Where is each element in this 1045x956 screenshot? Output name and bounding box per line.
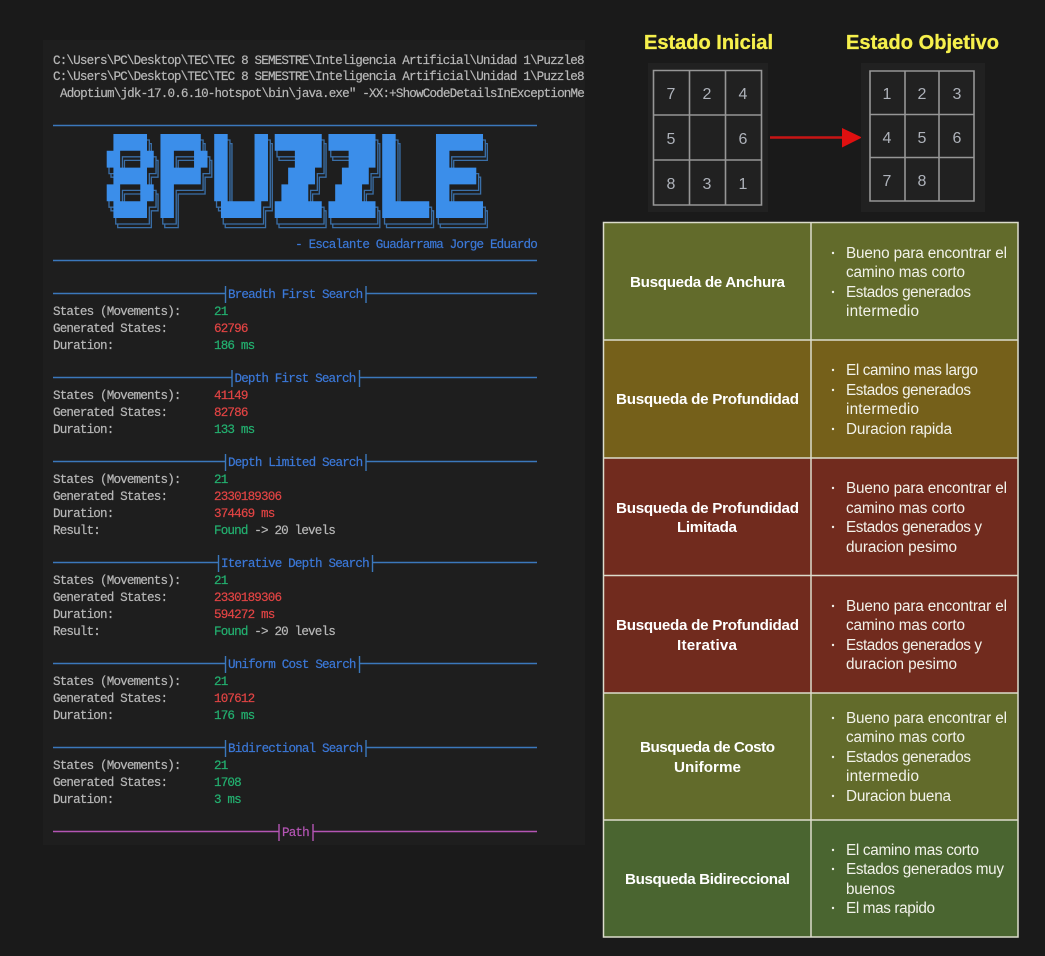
row: Busqueda Bidireccional: [625, 842, 1004, 917]
row: Busqueda de Anchura: intermedio: [846, 303, 919, 320]
banner: 8PUZZLE ascii logo: [53, 126, 537, 260]
section: Breadth First Search: Generated States:: [53, 322, 167, 336]
row: Busqueda de Profundidad Limitada: Estados generados y: [846, 519, 982, 536]
row: Busqueda de Profundidad Iterativa: Busqueda de Profundidad: [616, 617, 799, 634]
section: Breadth First Search: 186 ms: [214, 339, 255, 353]
row: Busqueda de Profundidad Iterativa: Bueno para encontrar el: [846, 598, 1007, 615]
row: Busqueda de Profundidad Iterativa: Iterativa: [677, 637, 738, 654]
row: Busqueda de Profundidad Limitada: duracion pesimo: [846, 539, 957, 556]
row: Busqueda Bidireccional: buenos: [846, 881, 895, 898]
section: Bidirectional Search: Duration:: [53, 793, 113, 807]
section: Depth First Search: States (Movements):: [53, 389, 181, 403]
section: Uniform Cost Search: States (Movements):: [53, 675, 181, 689]
puzzle: goal state: 3: [953, 86, 962, 103]
row: Busqueda de Profundidad: intermedio: [846, 401, 919, 418]
heading: Estado Inicial: Estado Inicial: [644, 32, 773, 54]
row: Busqueda de Costo Uniforme: Bueno para encontrar el: [846, 710, 1007, 727]
section: Depth First Search: Depth First Search: [234, 372, 356, 386]
section: Iterative Depth Search: Found -> 20 levels: [214, 625, 335, 639]
section: Uniform Cost Search: Duration:: [53, 709, 113, 723]
row: Busqueda de Anchura: Bueno para encontrar el: [846, 245, 1007, 262]
row: Busqueda de Anchura: Busqueda de Anchura: [630, 274, 786, 291]
puzzle: initial state: 3: [703, 176, 712, 193]
puzzle: goal state: 1: [883, 86, 892, 103]
section: Depth Limited Search: 374469 ms: [214, 507, 275, 521]
section: Breadth First Search: [53, 286, 537, 353]
author credit: - Escalante Guadarrama Jorge Eduardo: [295, 238, 537, 252]
puzzle: initial state: 8: [667, 176, 676, 193]
row: Busqueda de Costo Uniforme: Estados generados: [846, 749, 971, 766]
row: Busqueda de Profundidad Limitada: [616, 480, 1007, 556]
row: Busqueda Bidireccional: Estados generados muy: [846, 861, 1004, 878]
section: Iterative Depth Search: [53, 555, 537, 639]
section: Bidirectional Search: [53, 740, 537, 807]
puzzle: initial state: 2: [703, 86, 712, 103]
row: Busqueda Bidireccional: El mas rapido: [846, 900, 935, 917]
row: Busqueda de Profundidad: Duracion rapida: [846, 421, 952, 438]
row: Busqueda de Profundidad Iterativa: duracion pesimo: [846, 656, 957, 673]
row: Busqueda de Profundidad: El camino mas largo: [846, 362, 978, 379]
row: Busqueda Bidireccional: El camino mas corto: [846, 842, 979, 859]
row: Busqueda de Profundidad Limitada: Busqueda de Profundidad: [616, 500, 799, 517]
puzzle: initial state: 6: [739, 131, 748, 148]
section: Bidirectional Search: 21: [214, 759, 228, 773]
puzzle: initial state: 5: [667, 131, 676, 148]
panel: terminal output: [43, 40, 585, 845]
puzzle: goal state: [861, 63, 985, 212]
section: Iterative Depth Search: States (Movements):: [53, 574, 181, 588]
section: Depth Limited Search: [53, 454, 537, 538]
section: Iterative Depth Search: Iterative Depth Search: [221, 557, 369, 571]
puzzle: goal state: 4: [883, 130, 892, 147]
terminal command lines: [53, 54, 584, 101]
section: Bidirectional Search: Bidirectional Search: [228, 742, 363, 756]
row: Busqueda de Profundidad: Busqueda de Profundidad: [616, 391, 799, 408]
row: Busqueda de Costo Uniforme: [640, 710, 1007, 805]
section: Depth First Search: 41149: [214, 389, 248, 403]
row: Busqueda de Profundidad Iterativa: [616, 598, 1007, 673]
puzzle: initial state: [648, 63, 768, 212]
row: Busqueda de Profundidad Limitada: Bueno para encontrar el: [846, 480, 1007, 497]
section: Bidirectional Search: States (Movements):: [53, 759, 181, 773]
row: Busqueda de Costo Uniforme: Busqueda de Costo: [640, 739, 775, 756]
puzzle: goal state: 5: [918, 130, 927, 147]
section: Uniform Cost Search: [53, 656, 537, 723]
section: Uniform Cost Search: 21: [214, 675, 228, 689]
section: Uniform Cost Search: 176 ms: [214, 709, 255, 723]
row: Busqueda de Profundidad Limitada: Limitada: [677, 519, 738, 536]
section: Breadth First Search: 62796: [214, 322, 248, 336]
section: Uniform Cost Search: Generated States:: [53, 692, 167, 706]
row: Busqueda de Costo Uniforme: camino mas corto: [846, 729, 965, 746]
row: Busqueda de Profundidad Iterativa: Estados generados y: [846, 637, 982, 654]
row: Busqueda de Anchura: Estados generados: [846, 284, 971, 301]
section: Iterative Depth Search: 2330189306: [214, 591, 281, 605]
puzzle: initial state: 1: [739, 176, 748, 193]
section: Bidirectional Search: 1708: [214, 776, 241, 790]
section: Breadth First Search: States (Movements):: [53, 305, 181, 319]
section: Depth First Search: Duration:: [53, 423, 113, 437]
puzzle: goal state: 8: [918, 173, 927, 190]
row: Busqueda de Anchura: camino mas corto: [846, 264, 965, 281]
terminal command lines: Adoptium\jdk-17.0.6.10-hotspot\bin\java.exe" -XX:+ShowCodeDetailsInExceptionMe: [60, 87, 584, 101]
section: Path: [53, 824, 537, 841]
row: Busqueda de Profundidad Limitada: camino mas corto: [846, 500, 965, 517]
row: Busqueda de Profundidad Iterativa: camino mas corto: [846, 617, 965, 634]
terminal command lines: C:\Users\PC\Desktop\TEC\TEC 8 SEMESTRE\Inteligencia Artificial\Unidad 1\Puzzle8: [53, 70, 584, 84]
row: Busqueda de Costo Uniforme: intermedio: [846, 768, 919, 785]
terminal command lines: C:\Users\PC\Desktop\TEC\TEC 8 SEMESTRE\Inteligencia Artificial\Unidad 1\Puzzle8: [53, 54, 584, 68]
section: Depth Limited Search: Duration:: [53, 507, 113, 521]
heading: Estado Objetivo: Estado Objetivo: [846, 32, 999, 54]
section: Depth Limited Search: 21: [214, 473, 228, 487]
row: Busqueda Bidireccional: Busqueda Bidireccional: [625, 871, 790, 888]
section: Depth Limited Search: 2330189306: [214, 490, 281, 504]
puzzle: initial state: 7: [667, 86, 676, 103]
row: Busqueda de Costo Uniforme: Uniforme: [674, 759, 741, 776]
section: Iterative Depth Search: 21: [214, 574, 228, 588]
section: Depth First Search: 82786: [214, 406, 248, 420]
row: Busqueda de Anchura: [630, 245, 1007, 320]
puzzle: goal state: 2: [918, 86, 927, 103]
section: Iterative Depth Search: Generated States:: [53, 591, 167, 605]
puzzle: initial state: 4: [739, 86, 748, 103]
section: Uniform Cost Search: 107612: [214, 692, 255, 706]
puzzle: goal state: 7: [883, 173, 892, 190]
puzzle: goal state: 6: [953, 130, 962, 147]
section: Depth First Search: [53, 370, 537, 437]
section: Iterative Depth Search: 594272 ms: [214, 608, 275, 622]
row: Busqueda de Profundidad: Estados generados: [846, 382, 971, 399]
section: Iterative Depth Search: Duration:: [53, 608, 113, 622]
table: algorithm comparison: [603, 222, 1018, 937]
section: Depth First Search: Generated States:: [53, 406, 167, 420]
section: Path: Path: [282, 826, 309, 840]
section: Depth Limited Search: Generated States:: [53, 490, 167, 504]
section: Uniform Cost Search: Uniform Cost Search: [228, 658, 356, 672]
section: Bidirectional Search: 3 ms: [214, 793, 241, 807]
section: Depth Limited Search: Depth Limited Search: [228, 456, 363, 470]
section: Breadth First Search: 21: [214, 305, 228, 319]
section: Depth Limited Search: Found -> 20 levels: [214, 524, 335, 538]
section: Depth Limited Search: Result:: [53, 524, 100, 538]
section: Breadth First Search: Duration:: [53, 339, 113, 353]
section: Depth First Search: 133 ms: [214, 423, 255, 437]
row: Busqueda de Profundidad: [616, 362, 978, 438]
section: Bidirectional Search: Generated States:: [53, 776, 167, 790]
section: Breadth First Search: Breadth First Search: [228, 288, 363, 302]
row: Busqueda de Costo Uniforme: Duracion buena: [846, 788, 951, 805]
section: Iterative Depth Search: Result:: [53, 625, 100, 639]
arrow: initial to goal: [770, 128, 862, 148]
section: Depth Limited Search: States (Movements):: [53, 473, 181, 487]
